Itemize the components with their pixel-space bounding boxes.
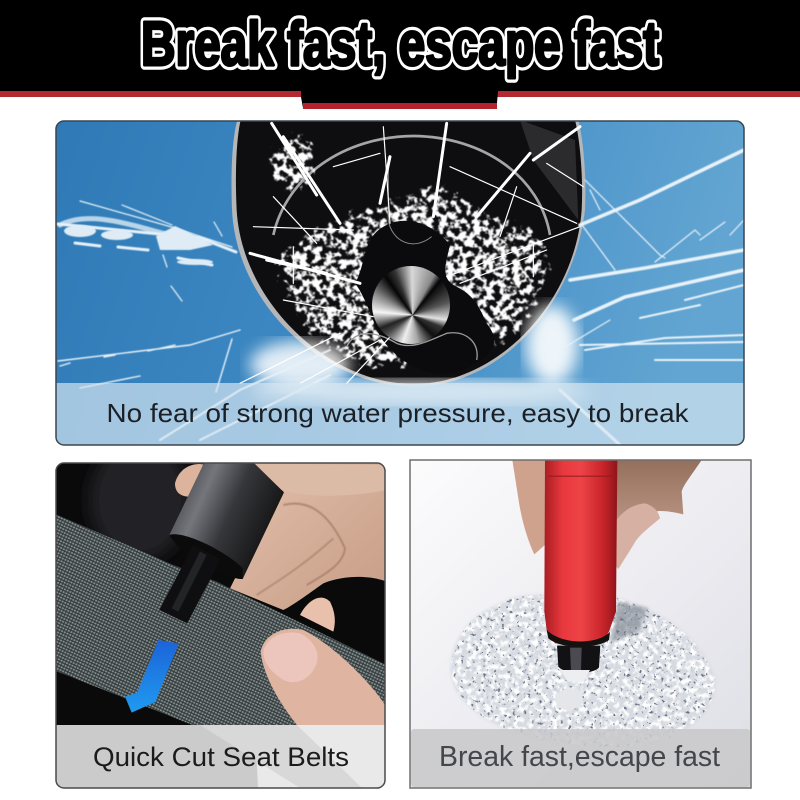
caption strip	[56, 725, 385, 788]
paper background	[410, 460, 751, 788]
right glass cracks	[560, 150, 744, 445]
seat belt	[56, 514, 387, 727]
caption text: Quick Cut Seat Belts	[93, 742, 349, 772]
caption strip	[411, 729, 750, 787]
right fingers	[616, 460, 702, 569]
panel border	[56, 121, 744, 445]
title: Break fast, escape fast	[141, 10, 659, 79]
red tool	[544, 460, 617, 682]
glass debris	[263, 127, 553, 377]
hand holding tool	[175, 463, 387, 632]
header band	[0, 0, 800, 109]
icon: breaker head behind glass	[231, 120, 585, 387]
cracks over head	[240, 123, 583, 383]
window background	[56, 121, 744, 445]
panel: breaking glass	[410, 460, 751, 788]
dark car background	[56, 464, 384, 725]
caption text: No fear of strong water pressure, easy to break	[106, 398, 690, 428]
icon: conical tip	[372, 266, 452, 346]
left finger	[512, 460, 547, 554]
panel: seat belt cutter	[56, 440, 387, 788]
shattered glass	[451, 594, 715, 747]
cutter tool	[159, 463, 284, 623]
caption text: Break fast,escape fast	[439, 741, 720, 773]
panel: broken window	[56, 120, 744, 445]
thumb	[261, 629, 385, 727]
dark well around the tip	[355, 221, 494, 374]
panel border	[410, 460, 751, 788]
left glass chunks	[64, 225, 213, 265]
white burst at bottom	[250, 305, 590, 404]
left glass cracks	[58, 201, 330, 440]
title: Break fast, escape fast	[141, 10, 659, 79]
icon: blue arrow	[125, 640, 179, 713]
caption strip	[56, 383, 744, 445]
panel border	[56, 463, 385, 788]
